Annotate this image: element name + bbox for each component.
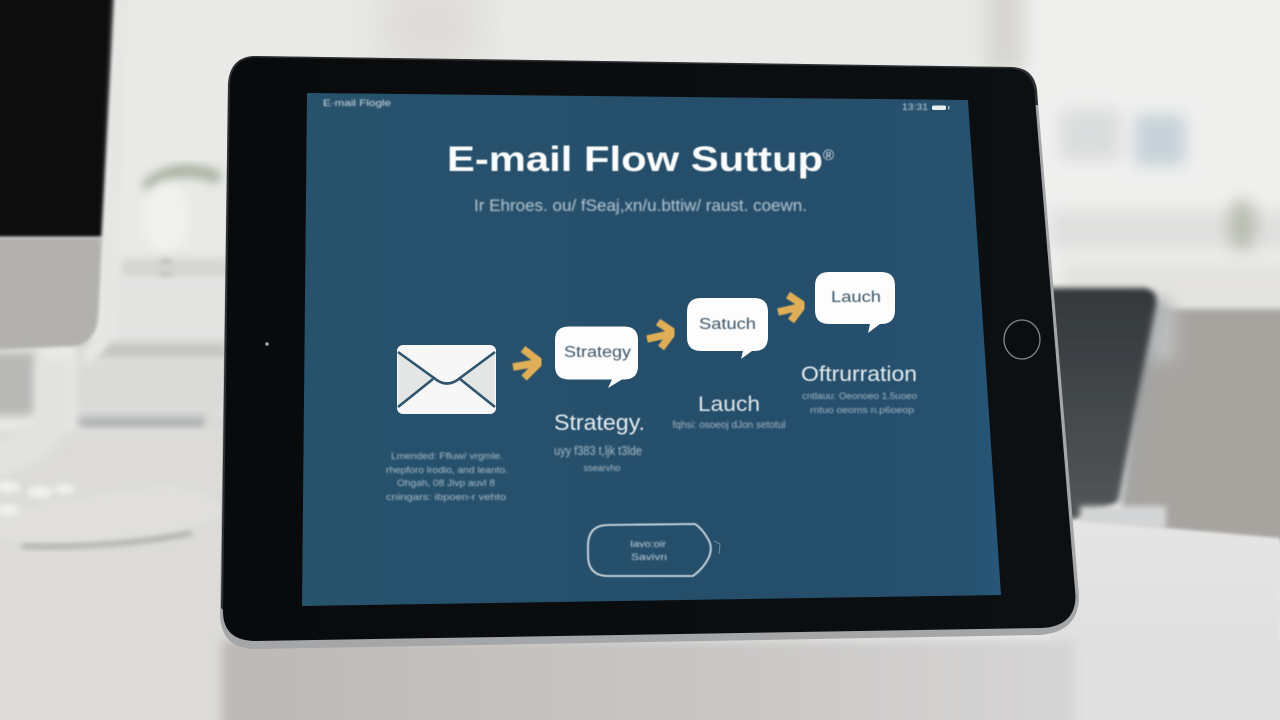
column 2 caption (554, 443, 642, 473)
shelf items (75, 258, 230, 435)
column 2 caption: uyy f383 t,ljk t3lde (554, 443, 642, 458)
desk surface (0, 430, 1280, 720)
plant and vase (142, 171, 220, 276)
screen (302, 93, 1001, 606)
column 1 caption (386, 451, 508, 503)
keyboard and mouse (0, 481, 222, 546)
cabinet on right (1120, 309, 1280, 545)
column 3 caption: fqhsi: osoeoj dJon setotul (672, 420, 786, 431)
tablet bezel (223, 58, 1076, 641)
speech bubble: Satuch: Satuch (699, 316, 756, 333)
office chair (1040, 288, 1157, 525)
speech bubble: Lauch (815, 272, 895, 333)
speech bubble: Strategy (555, 326, 638, 388)
status bar right (902, 102, 950, 112)
home button (1004, 320, 1040, 359)
tablet silver edge (220, 56, 1079, 649)
column 4 caption (802, 391, 917, 415)
column 1 caption: cningars: ibpoen-r vehto (386, 492, 506, 503)
speech bubble: Strategy: Strategy (564, 344, 631, 361)
column 1 caption: Lmended: Ffluw/ vrgmle. (391, 451, 503, 462)
heading: Strategy: Strategy. (554, 410, 645, 435)
status bar left: E·mail Flogle (323, 98, 391, 109)
column 1 caption: Ohgah, 08 Jivp auvl 8 (397, 478, 495, 489)
heading: Oftruration: Oftrurration (801, 363, 917, 386)
desktop monitor (0, 0, 122, 462)
speech bubble: Satuch (687, 298, 768, 359)
subtitle: Ir Ehroes. ou/ fSeaj,xn/u.bttiw/ raust. coewn. (474, 196, 807, 215)
column 4 caption: cntlauu: Oeonoeo 1.5uoeo (802, 391, 917, 401)
speech bubble: Lauch: Lauch (831, 289, 881, 306)
button: Savivn (631, 552, 667, 562)
column 2 caption: ssearvho (584, 463, 620, 473)
title: ® (823, 147, 834, 164)
arrow 3 (778, 295, 803, 321)
tablet dark top and left edge (221, 56, 1038, 636)
heading: Lauch: Lauch (698, 393, 760, 416)
button: Iavo:oir (630, 539, 666, 549)
tablet (220, 56, 1079, 649)
tablet camera (265, 342, 269, 346)
column 4 caption: rntuo oeoms n.p6oeop (810, 405, 914, 415)
icon: envelope (397, 345, 496, 414)
column 1 caption: rhepforo lrodio, and leanto. (386, 465, 508, 476)
arrow 1 (513, 349, 540, 378)
status bar right: 13:31 (902, 102, 928, 112)
arrow 2 (647, 322, 673, 348)
title: E-mail Flow Suttup (447, 139, 823, 179)
button (588, 524, 720, 576)
